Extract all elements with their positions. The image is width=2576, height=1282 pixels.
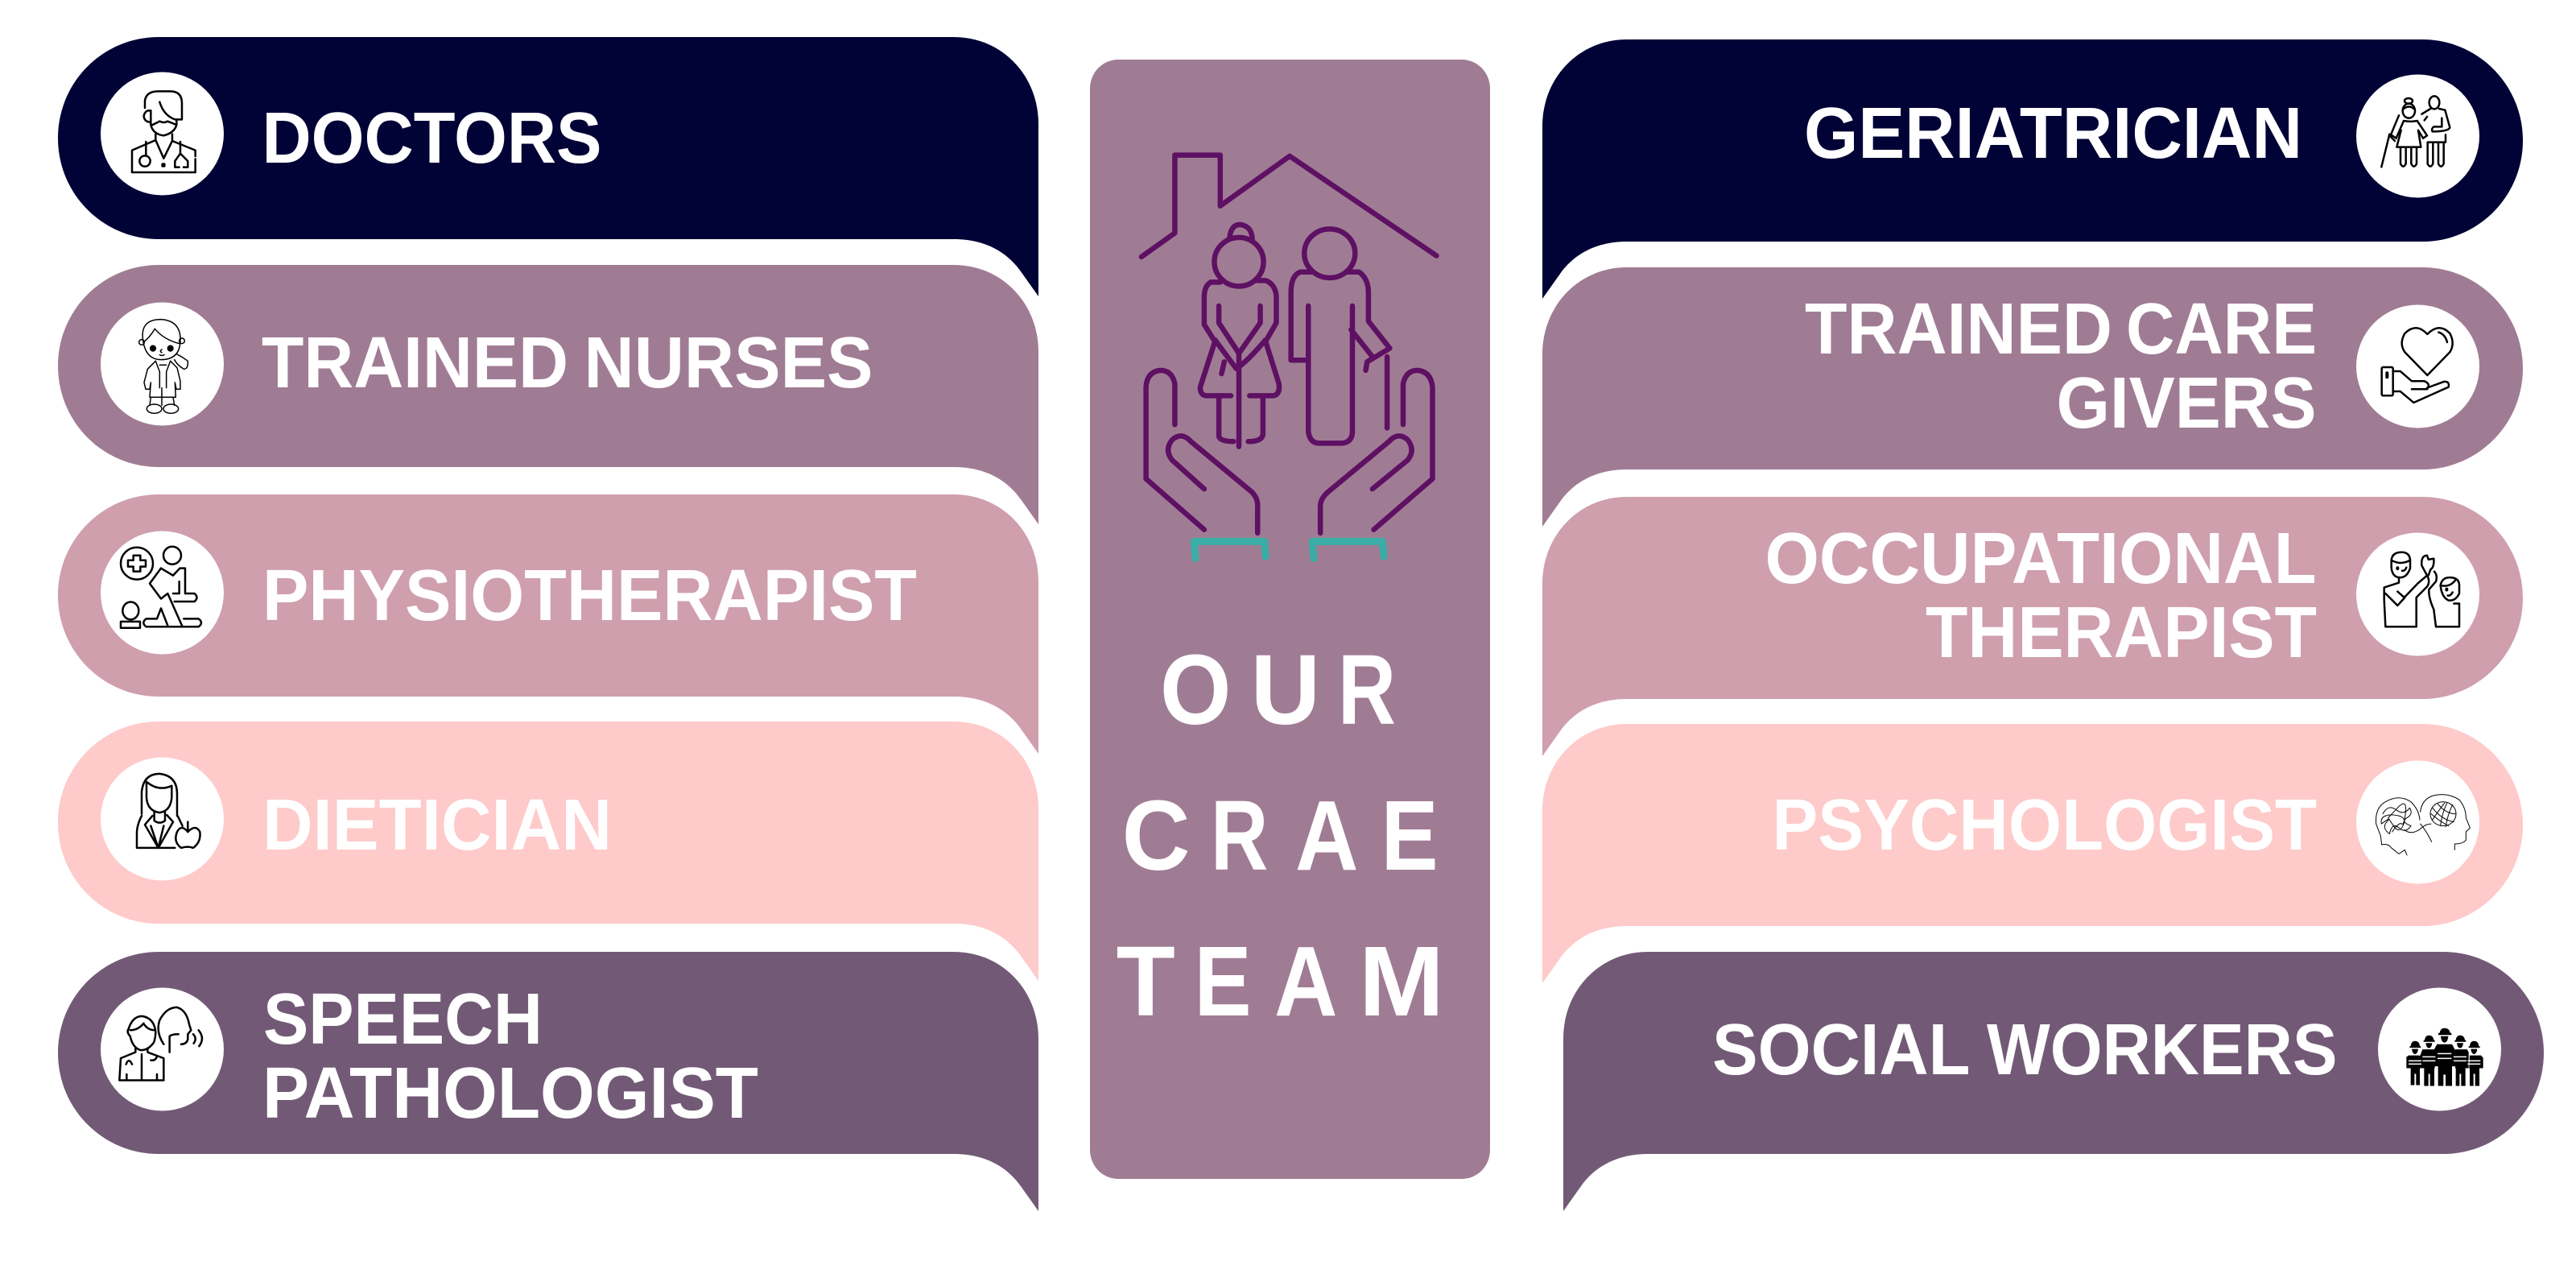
label: occupational therapist bbox=[1765, 519, 2317, 673]
label: trained nurses: TRAINED bbox=[262, 323, 568, 403]
panel: trained nurses bbox=[58, 265, 1038, 524]
icon: physiotherapist treating patient bbox=[121, 547, 201, 628]
panel: geriatrician bbox=[1542, 39, 2523, 299]
label: trained nurses: NURSES bbox=[584, 323, 873, 403]
label: occupational therapist: THERAPIST bbox=[1926, 593, 2317, 673]
title: our care team: E bbox=[1195, 926, 1251, 1037]
icon: speech pathologist and speaking profile bbox=[119, 1007, 202, 1080]
label: dietician: DIETICIAN bbox=[262, 785, 612, 866]
panel: dietician bbox=[58, 722, 1038, 981]
icon: doctor with mask and stethoscope bbox=[132, 91, 196, 172]
label: speech pathologist: PATHOLOGIST bbox=[262, 1053, 758, 1134]
icon: dietician with apple bbox=[137, 774, 200, 848]
icon: hand holding heart bbox=[2382, 328, 2453, 403]
icon: group of five workers in hard hats bbox=[2406, 1028, 2483, 1086]
label: doctors: DOCTORS bbox=[262, 98, 602, 179]
title: our care team: R bbox=[1211, 780, 1268, 891]
label: social workers: WORKERS bbox=[1987, 1010, 2338, 1090]
title: our care team: R bbox=[1338, 635, 1396, 746]
label: physiotherapist: PHYSIOTHERAPIST bbox=[262, 556, 917, 636]
panel: physiotherapist bbox=[58, 494, 1038, 754]
icon: carer supporting elderly woman with cane bbox=[2381, 96, 2450, 167]
title: our care team: A bbox=[1274, 926, 1338, 1037]
label: psychologist: PSYCHOLOGIST bbox=[1773, 785, 2317, 866]
title: our care team: T bbox=[1117, 926, 1175, 1037]
icon: therapist and patient raising arm bbox=[2384, 552, 2459, 627]
panel: social workers bbox=[1563, 952, 2544, 1211]
label: trained care givers: GIVERS bbox=[2056, 363, 2317, 444]
title: our care team: O bbox=[1160, 635, 1231, 746]
label: trained nurses bbox=[262, 323, 873, 403]
label: trained care givers bbox=[1805, 289, 2317, 444]
panel: doctors bbox=[58, 37, 1038, 296]
label: speech pathologist bbox=[262, 979, 758, 1134]
title: our care team: E bbox=[1381, 780, 1438, 891]
title: our care team: U bbox=[1251, 635, 1320, 746]
label: geriatrician: GERIATRICIAN bbox=[1804, 93, 2302, 174]
panel: occupational therapist bbox=[1542, 497, 2523, 756]
title: our care team: M bbox=[1359, 926, 1444, 1037]
label: social workers: SOCIAL bbox=[1712, 1010, 1971, 1090]
panel: centre title card bbox=[1090, 60, 1490, 1179]
icon: elderly couple in house held by hands bbox=[1141, 155, 1436, 558]
panel: speech pathologist bbox=[58, 952, 1038, 1211]
label: occupational therapist: OCCUPATIONAL bbox=[1765, 519, 2317, 599]
title: our care team: A bbox=[1295, 780, 1359, 891]
title: our care team: C bbox=[1122, 780, 1190, 891]
panel: trained care givers bbox=[1542, 267, 2523, 527]
panel: psychologist bbox=[1542, 724, 2523, 983]
icon: two heads with tangled and organised thoughts bbox=[2376, 795, 2470, 855]
label: social workers bbox=[1712, 1010, 2338, 1090]
label: trained care givers: CARE bbox=[2126, 289, 2317, 370]
icon: nurse figure bbox=[139, 320, 188, 413]
title: our care team bbox=[1117, 635, 1444, 1037]
label: trained care givers: TRAINED bbox=[1805, 289, 2112, 370]
label: speech pathologist: SPEECH bbox=[263, 979, 543, 1060]
